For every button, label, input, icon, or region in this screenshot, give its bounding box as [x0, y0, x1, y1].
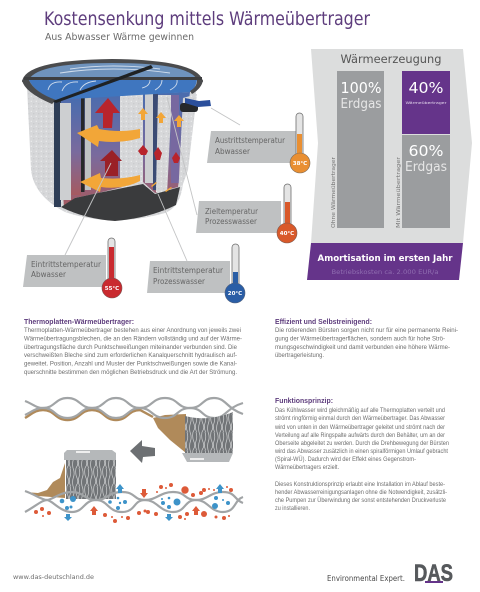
upper plates — [25, 398, 243, 418]
thermometer: 20°C — [225, 244, 245, 303]
panel background arrow — [311, 49, 472, 243]
bar: ohne Wärmeübertrager: 100% — [340, 79, 382, 97]
text block: Funktionsprinzip — [274, 398, 449, 512]
text block: Funktionsprinzip: hender Abwasserreinigungsanlagen ohne die Notwendigkeit, zusätzli- — [275, 490, 447, 496]
text block: Funktionsprinzip: Funktionsprinzip: — [275, 398, 333, 405]
text block: Funktionsprinzip: Oberseite abgeleitet zu werden. Durch die Drehbewegung der Bürsten — [275, 441, 449, 447]
lid crossbar — [24, 77, 202, 80]
text block: Funktionsprinzip: (Spiral-WÜ). Dadurch wird der Effekt eines Gegenstrom- — [275, 456, 416, 463]
lower wedge — [25, 463, 65, 498]
upper brush — [182, 412, 233, 462]
bar: ohne Wärmeübertrager: Erdgas — [340, 97, 382, 112]
label: Austrittstemperatur Abwasser — [207, 131, 296, 163]
label: Zieltemperatur Prozesswasser — [196, 201, 281, 233]
internal plates — [54, 91, 197, 207]
text block: Thermoplatten-Wärmeübertrager: Thermoplatten-Wärmeübertrager bestehen aus einer Anordnung von jeweils zwei — [24, 328, 241, 334]
thermometer: 38°C — [290, 113, 310, 173]
rotating arm — [53, 65, 153, 103]
text block: Thermoplatten-Wärmeübertrager: übertragungsfläche durch Punktschweißungen miteinander verbunden sind. Die — [24, 345, 238, 351]
axis label: mit: Mit Wärmeübertrager — [396, 156, 402, 228]
outlet pipe — [180, 98, 211, 112]
subtitle: Aus Abwasser Wärme gewinnen — [45, 32, 194, 43]
text block: Funktionsprinzip: wird das Abwasser zusätzlich in einen spiralförmigen Umlauf gebracht — [274, 449, 448, 455]
panel heading: Wärmeerzeugung — [340, 52, 442, 66]
thermometer: 38°C: 38°C — [293, 161, 307, 167]
small red arrows — [138, 145, 180, 163]
text block: Funktionsprinzip: zu installieren. — [275, 506, 310, 512]
waste water dots — [34, 483, 233, 523]
text block: Funktionsprinzip: wird von unten in den Wärmeübertrager geleitet und strömt nach der — [274, 425, 445, 431]
small arrows — [138, 108, 184, 192]
tank body — [27, 86, 197, 220]
purple banner — [307, 243, 463, 280]
label: Eintrittstemperatur Prozesswasser — [147, 261, 230, 293]
far basin — [28, 62, 197, 78]
water surface — [29, 80, 197, 100]
upper sediment layer — [25, 410, 153, 420]
tank floor — [61, 184, 180, 221]
text block: Thermoplatten-Wärmeübertrager: Thermoplatten-Wärmeübertrager: — [24, 319, 134, 326]
text block: Funktionsprinzip: Dieses Konstruktionsprinzip erlaubt eine Installation im Ablauf beste- — [275, 482, 445, 488]
text block: Effizient und Selbstreinigend: Die rotierenden Bürsten sorgen nicht nur für eine permanente Reini- — [275, 328, 458, 334]
lid rim — [22, 59, 203, 104]
text block: Thermoplatten-Wärmeübertrager — [24, 319, 242, 376]
text block: Effizient und Selbstreinigend — [275, 319, 458, 359]
thermometer: 55°C: 55°C — [105, 286, 119, 292]
label: Eintrittstemperatur Abwasser: Abwasser — [31, 270, 67, 279]
bar: 40% Wärmeübertrager: 40% — [408, 79, 444, 97]
footer tagline: Environmental Expert. — [327, 574, 405, 583]
text block: Thermoplatten-Wärmeübertrager: Wärmeübertragungsblechen, die an den Rändern vollständig und auf der Wärme- — [24, 336, 242, 342]
label: Eintrittstemperatur Prozesswasser: Eintrittstemperatur — [153, 266, 224, 275]
water ripples — [48, 66, 177, 91]
logo: DAS: DAS — [414, 560, 453, 587]
text block: Effizient und Selbstreinigend: übertragerleistung. — [275, 353, 324, 359]
text block: Funktionsprinzip: Wärmeübertragers erzielt. — [275, 465, 339, 471]
lower plates — [25, 491, 243, 512]
tank illustration — [22, 59, 211, 221]
bar: 60% Erdgas: Erdgas — [405, 160, 447, 175]
label: Zieltemperatur Prozesswasser: Zieltemperatur — [205, 207, 259, 216]
panel: Wärmeerzeugung — [307, 49, 472, 280]
label: Zieltemperatur Prozesswasser: Prozesswasser — [205, 217, 258, 226]
text block: Effizient und Selbstreinigend: gung der Wärmeübertragerflächen, sondern auch für hohe Strö- — [275, 336, 445, 342]
thermometer: 55°C — [102, 238, 122, 298]
arrow: orange lower — [80, 173, 140, 192]
lower brush — [64, 450, 116, 499]
label: Austrittstemperatur Abwasser: Abwasser — [215, 147, 251, 156]
thermometer: 40°C: 40°C — [280, 231, 294, 237]
arrow: lower red up — [100, 150, 122, 176]
bar: 60% Erdgas — [402, 135, 450, 228]
text block: Funktionsprinzip: strömt ringförmig einmal durch den Wärmeübertrager. Das Abwasser — [275, 416, 445, 422]
tank interior wall — [55, 92, 190, 207]
purple banner: Amortisation im ersten Jahr — [318, 254, 453, 264]
axis label: ohne: Ohne Wärmeübertrager — [331, 156, 337, 228]
arrow: brush movement — [130, 440, 155, 463]
coolant dots — [60, 484, 230, 521]
bar: 40% Wärmeübertrager — [402, 71, 450, 134]
label: Austrittstemperatur Abwasser: Austrittstemperatur — [215, 136, 286, 145]
text block: Effizient und Selbstreinigend: Effizient und Selbstreinigend: — [275, 319, 372, 326]
label: Eintrittstemperatur Abwasser — [23, 255, 106, 287]
purple banner: Betriebskosten ca. 2.000 EUR/a — [332, 269, 439, 276]
upper wedge — [153, 414, 186, 453]
title: Kostensenkung mittels Wärmeübertrager — [44, 8, 370, 30]
footer url: www.das-deutschland.de — [13, 574, 94, 581]
text block: Thermoplatten-Wärmeübertrager: querschnitte bestimmen den möglichen Betriebsdruck und die Art der Strömung. — [24, 370, 237, 376]
bar: 60% Erdgas: 60% — [408, 142, 444, 160]
text block: Funktionsprinzip: che Pumpen zur Überwindung der sonst entstehenden Druckverluste — [275, 497, 447, 504]
leader lines — [65, 97, 240, 261]
label: Eintrittstemperatur Abwasser: Eintrittstemperatur — [31, 260, 102, 269]
bar: ohne Wärmeübertrager — [337, 71, 384, 228]
cleaning illustration — [25, 398, 243, 523]
bar: 40% Wärmeübertrager: Wärmeübertrager — [406, 101, 447, 105]
thermometer: 20°C: 20°C — [228, 291, 242, 297]
text block: Effizient und Selbstreinigend: mungsgeschwindigkeit und damit verbunden eine höhere Wärme- — [275, 345, 450, 351]
text block: Funktionsprinzip: Verteilung auf alle Ringspalte aufwärts durch den Behälter, um an der — [275, 433, 445, 439]
text block: Thermoplatten-Wärmeübertrager: verschweißten Bleche sind zum erforderlichen Kanalquerschnitt hydraulisch auf- — [24, 353, 237, 359]
thermometer: 40°C — [277, 184, 297, 243]
arrow: red up — [95, 98, 120, 128]
text block: Funktionsprinzip: Das Kühlwasser wird gleichmäßig auf alle Thermoplatten verteilt und — [275, 408, 445, 414]
label: Eintrittstemperatur Prozesswasser: Prozesswasser — [153, 277, 206, 286]
text block: Thermoplatten-Wärmeübertrager: geweitet. Position, Anzahl und Muster der Punktschweißungen sowie die Kanal- — [24, 362, 237, 368]
arrow: orange upper — [77, 125, 140, 147]
